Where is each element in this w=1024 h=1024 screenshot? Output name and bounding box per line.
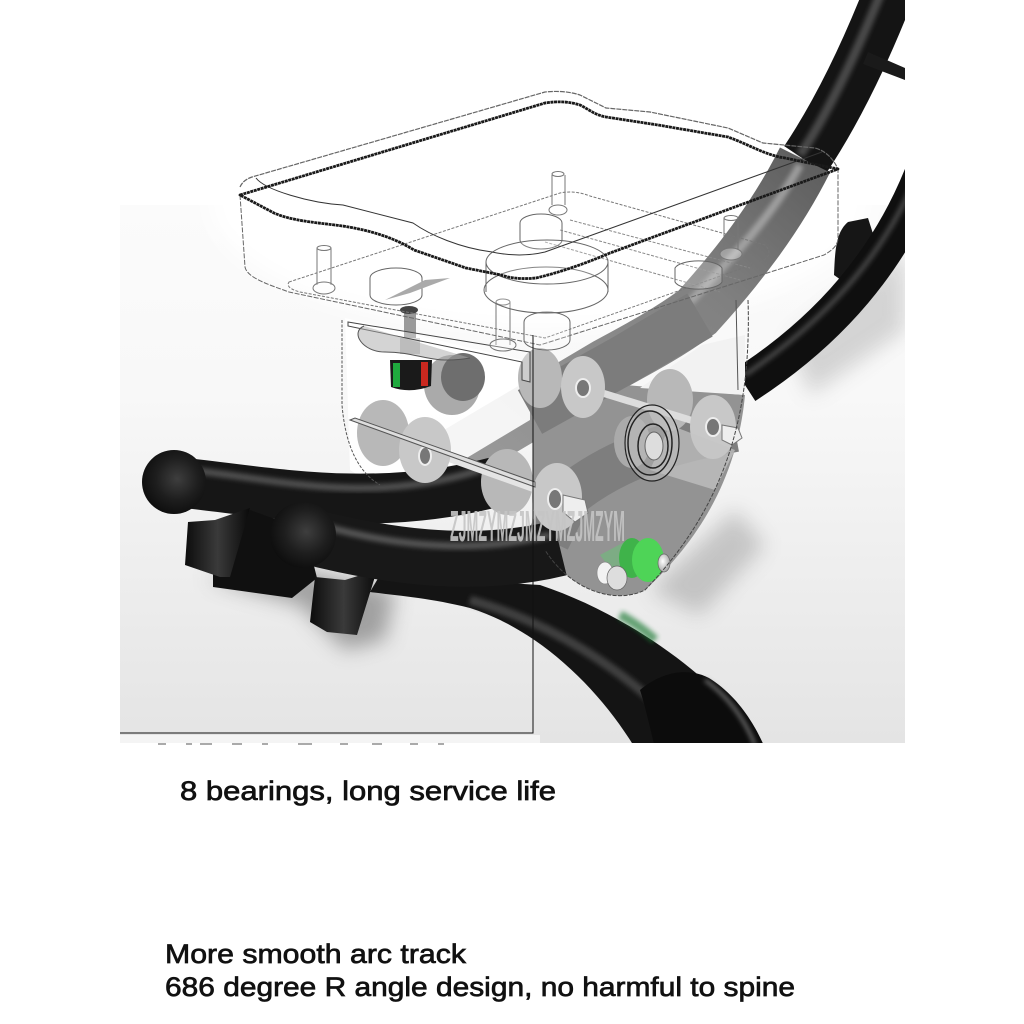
carriage transparent brackets	[342, 300, 748, 596]
front rollers	[399, 356, 736, 531]
axle nuts	[563, 425, 742, 522]
caption: arc track	[165, 939, 795, 1002]
green knob with bolts	[597, 538, 670, 590]
rear dark roller	[424, 353, 485, 415]
seat mark	[385, 278, 450, 300]
line one: More smooth arc track	[165, 939, 467, 969]
back rollers	[357, 348, 693, 515]
caption: bearings: 8 bearings, long service life	[180, 776, 556, 806]
product infographic	[120, 0, 905, 1002]
handle foot block	[213, 510, 317, 598]
seat mounting pins	[313, 172, 742, 351]
sensor with green and red marks	[390, 306, 432, 390]
lower carriage gray housing	[533, 385, 745, 596]
seat top outer outline	[240, 91, 838, 187]
white band under frame	[120, 735, 540, 743]
seat thick outline	[240, 102, 838, 279]
side knob	[834, 218, 872, 278]
seat bumpers	[370, 214, 722, 350]
photo panel: seat carriage on arc rail	[120, 0, 925, 748]
frame line	[120, 335, 533, 733]
lower arc rail with grip	[370, 575, 765, 748]
seat inner contour	[256, 152, 822, 255]
photo panel: seat carriage on arc rail: ZJMZYMZJMZYMZJMZYM	[450, 502, 625, 551]
front foot	[310, 576, 374, 635]
white glow behind seat	[210, 70, 870, 330]
top right cross bar	[882, 60, 905, 80]
white nut	[597, 562, 627, 590]
seat guide slots	[545, 220, 750, 292]
darker tube shade in housing	[548, 430, 735, 540]
transparent seat and plate	[240, 91, 838, 351]
line two: 686 degree R angle design, no harmful to spine	[165, 972, 795, 1002]
seat mounting plate	[288, 192, 769, 338]
transparent carriage white interior	[349, 386, 530, 474]
axle shafts	[449, 390, 692, 492]
rear foot	[185, 508, 250, 577]
black handle bar rear	[142, 450, 495, 514]
roller and bearing assembly	[357, 348, 742, 531]
right rail tube	[745, 170, 925, 385]
panel background gradient	[120, 411, 905, 743]
center bearing	[614, 405, 735, 490]
cut-off text remnants	[158, 743, 444, 745]
roller bearings	[419, 379, 720, 509]
gray upper tube passing through housing	[530, 315, 700, 412]
seat box lower walls	[240, 169, 838, 345]
ground shadows	[205, 250, 905, 650]
rear rail: upper arc tube	[455, 0, 892, 456]
lighter window right of tube	[640, 362, 745, 395]
black handle bar front	[270, 502, 560, 568]
